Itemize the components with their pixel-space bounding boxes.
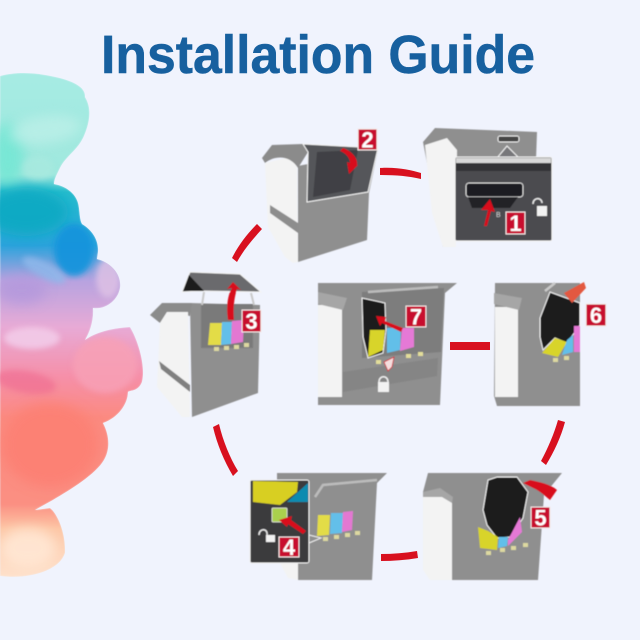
step 2: cabinet [298, 150, 378, 262]
step 7: arrow [376, 316, 403, 332]
step 3: yellow cartridge [208, 323, 222, 345]
step 6: output tray [494, 293, 522, 310]
step 5: body [423, 473, 562, 580]
step 4: inset pointer [309, 535, 321, 543]
step 7: white side [318, 305, 342, 397]
step 2: door recess [313, 150, 358, 197]
step 7: tabs [376, 352, 423, 364]
smoke: pale teal lobe [22, 160, 50, 182]
step 4: door arch [315, 480, 377, 497]
step 1: inset light band [456, 158, 551, 163]
ring segment 4-5 [381, 551, 418, 561]
step 5: yellow cartridge [478, 527, 498, 550]
smoke: pale blue curl [22, 254, 66, 286]
step 3: magenta cartridge [231, 320, 244, 344]
step 7: door interior [362, 288, 444, 358]
step 3: door struts [202, 292, 254, 305]
step 4: tabs [323, 531, 360, 541]
smoke: rose shading [0, 368, 56, 395]
step 3: body [190, 303, 260, 417]
step 2: number badge: 2 [361, 128, 374, 152]
step 3: cover black side [183, 275, 204, 291]
step 6: magenta cartridge [574, 326, 580, 352]
smoke: lilac edge [96, 258, 120, 298]
step 3: number badge: 3 [245, 309, 258, 334]
ring segment 3-4 [213, 424, 238, 476]
step 4: arrow [279, 516, 306, 534]
step 3: grey roof [150, 303, 192, 323]
smoke: pink billow [73, 337, 137, 393]
step 2: side handle [270, 205, 298, 233]
step 2: open door [303, 144, 378, 202]
step 7: magenta cartridge [400, 328, 414, 351]
step 3: printer with open top [150, 272, 261, 417]
ring segment 5-6 [541, 420, 565, 465]
step 1: inset panel [455, 157, 552, 241]
step 7: printer [318, 283, 457, 405]
step 5: tabs [486, 543, 528, 555]
ring segment 1-2 [380, 168, 421, 179]
step 4: cyan cartridge [330, 513, 343, 534]
step 4: white base [280, 563, 298, 580]
smoke: peach tail [0, 528, 56, 568]
step 7: number badge: 7 [410, 304, 422, 330]
step 7: lower panel [343, 358, 438, 392]
step 1: arrow [481, 199, 495, 226]
smoke: teal shading [0, 123, 24, 187]
step 4: inset panel [250, 480, 309, 563]
step 6: yellow cartridge [542, 338, 567, 357]
title: Installation Guide [101, 25, 535, 85]
step 2: arrow [340, 148, 358, 174]
step 4: yellow inside [253, 481, 298, 505]
smoke: coral billow [2, 403, 98, 487]
step 3: open cover [182, 272, 261, 292]
step 2: white side panel [265, 157, 298, 263]
step 1: printer with inset [423, 128, 552, 247]
step 3: cyan cartridge [221, 322, 232, 345]
smoke: blue billow [54, 224, 94, 276]
step 5: white side [423, 496, 452, 580]
step 5: printer with toner [423, 473, 562, 580]
step 4: unlock icon [259, 530, 275, 542]
ring segment 2-3 [232, 224, 262, 262]
step 3: side handle [159, 361, 190, 392]
step 7: rotation mark [384, 357, 394, 371]
step 6: door strut [545, 283, 555, 291]
step 1: shadow below latch [468, 197, 518, 208]
step 5: output tray [423, 488, 453, 503]
step 3: white side [157, 312, 190, 417]
step 7: cyan cartridge [387, 328, 401, 353]
step 3: arrow [227, 282, 241, 320]
step 6: printer [494, 282, 606, 406]
step 6: number badge: 6 [590, 303, 602, 328]
step 5: magenta cartridge [508, 517, 522, 546]
step 7: door arch [368, 287, 438, 292]
step 6: cyan cartridge [562, 335, 573, 355]
smoke: pale teal billow [6, 114, 80, 148]
step 6: body [494, 283, 580, 406]
step 1: number badge: 1 [509, 211, 522, 236]
step 3: tabs [214, 343, 249, 351]
step 1: body [423, 128, 537, 247]
step 5: arrow [523, 480, 557, 500]
step 4: body [277, 473, 387, 580]
smoke: lilac billow [0, 280, 42, 306]
step 7: lock icon [378, 377, 389, 392]
step 1: white side [425, 138, 457, 247]
step 1: inset dark band [456, 163, 551, 171]
step 5: cyan cartridge [498, 537, 508, 548]
smoke: light pink billow [4, 327, 60, 349]
step 4: green latch [272, 508, 287, 522]
step 6: arrow [564, 282, 586, 303]
step 5: number badge: 5 [534, 506, 547, 530]
step 2: roof [262, 144, 308, 168]
smoke: deep teal billow [0, 188, 68, 236]
step 7: yellow cartridge [368, 330, 385, 357]
step 1: label B: B [496, 212, 501, 219]
step 4: number badge: 4 [283, 535, 296, 560]
step 4: cyan inside [287, 483, 308, 502]
step 1: latch slot [466, 183, 523, 197]
step 1: inset pointer [497, 146, 519, 158]
step 6: tabs [553, 356, 569, 362]
step 6: white side [495, 307, 518, 397]
step 6: black toner [540, 292, 580, 350]
step 3: interior [201, 304, 253, 348]
step 1: unlock icon [533, 199, 547, 216]
step 7: black toner outline [362, 298, 386, 358]
step 2: printer with door [262, 128, 378, 263]
step 4: magenta cartridge [342, 511, 353, 532]
ink smoke cloud [0, 73, 143, 577]
step 4: printer with inset [250, 473, 387, 580]
ring segment 6-7 [450, 342, 490, 350]
step 7: output tray [318, 292, 347, 310]
step 1: top latch [498, 136, 519, 142]
step 7: body [318, 283, 457, 405]
step 3: number badge [242, 309, 261, 334]
step 5: black toner [483, 477, 528, 538]
step 4: yellow cartridge [317, 515, 330, 536]
